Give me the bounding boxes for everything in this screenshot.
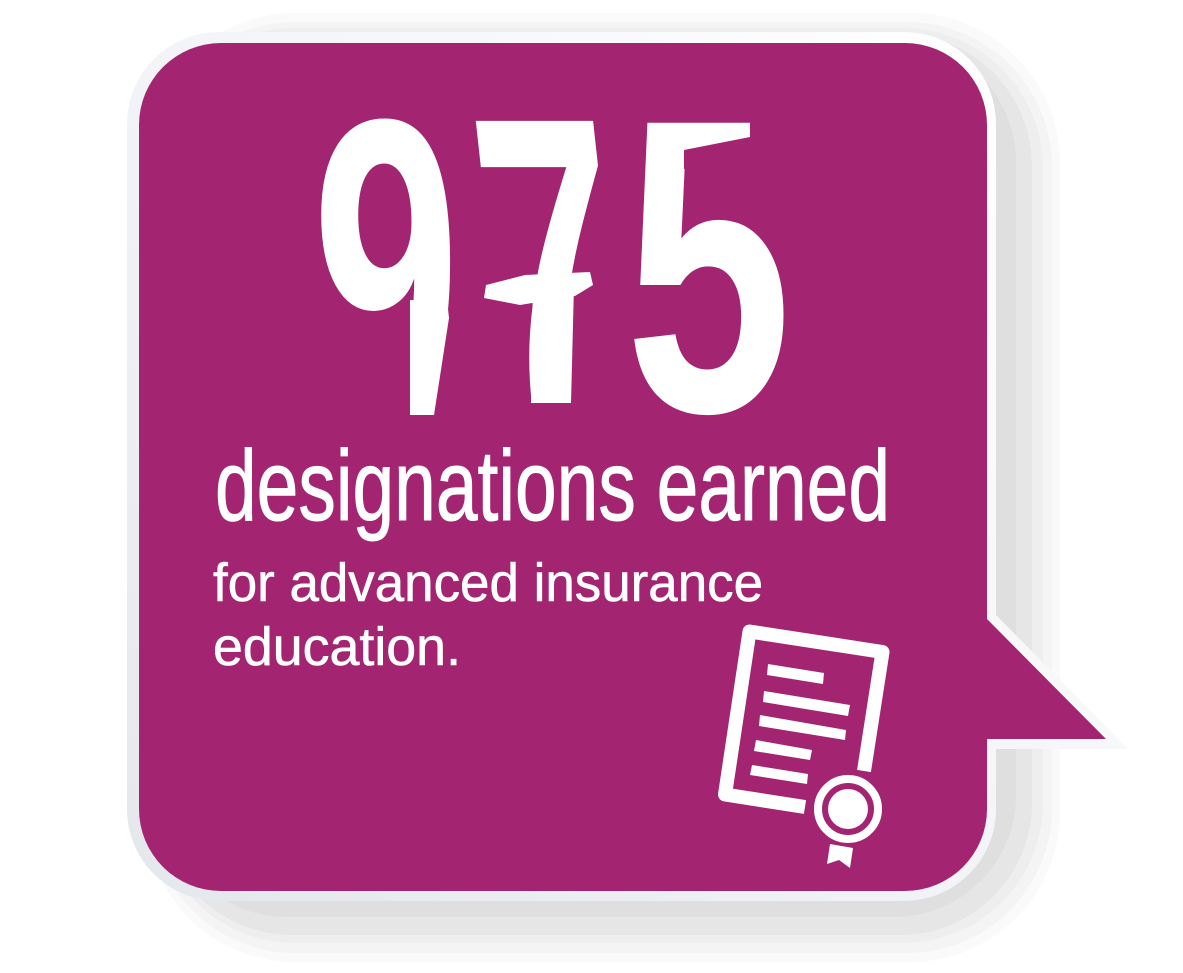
digit 9: 9 (312, 33, 460, 501)
certificate text lines (750, 664, 850, 784)
body text (213, 553, 763, 677)
bubble fill with pointer (139, 43, 1106, 891)
digit 7: 7 (455, 33, 645, 491)
speech bubble panel (127, 32, 1128, 901)
icon: certificate with ribbon seal (725, 632, 886, 868)
ribbon seal (810, 771, 886, 868)
big number 975 (312, 33, 795, 501)
body text: education. (213, 617, 461, 677)
body text: for advanced insurance (213, 553, 763, 613)
digit 5: 5 (625, 33, 792, 501)
layered drop shadow (145, 13, 1060, 962)
bubble outer border (127, 32, 1128, 901)
heading: designations earned: designations earned (215, 430, 890, 542)
certificate frame (725, 632, 882, 807)
